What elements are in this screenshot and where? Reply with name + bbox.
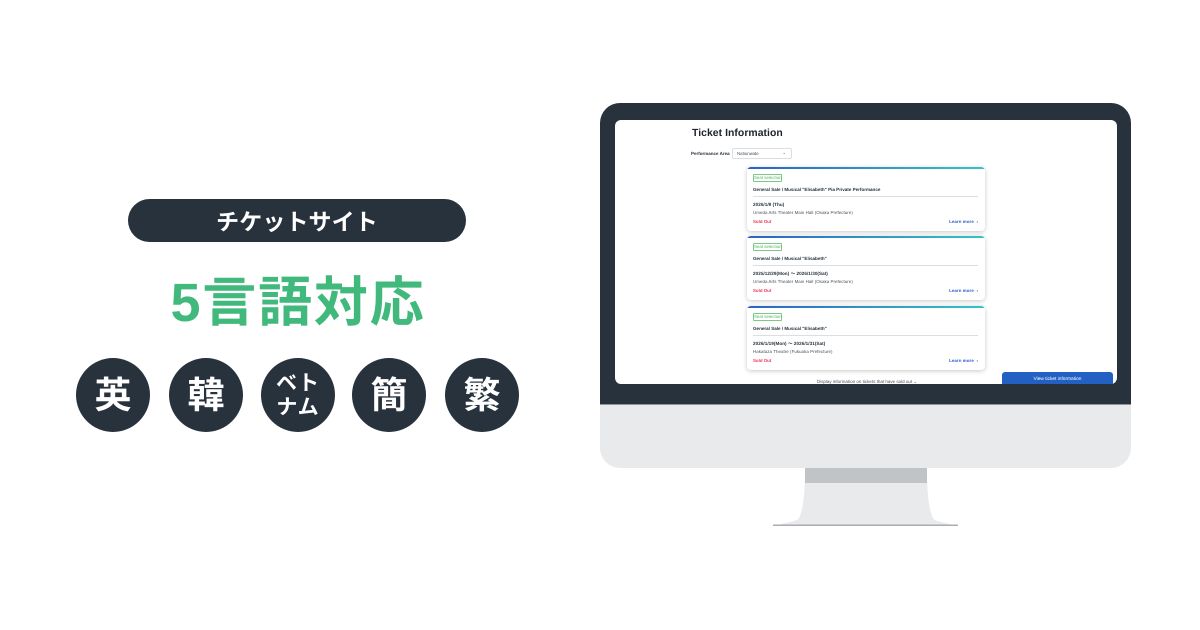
view ticket button: View ticket information: [1034, 377, 1081, 382]
ticket card 2: Umeda Arts Theater Main Hall (Osaka Prefecture): [753, 279, 853, 284]
seat tag: [753, 313, 782, 321]
seat tag: [753, 243, 782, 251]
language badge: Simplified Chinese: 簡: [370, 375, 408, 416]
badge: ticket site: [128, 199, 466, 242]
title: 5 language support: 5言語対応: [170, 273, 426, 333]
ticket card 2: [747, 236, 985, 300]
area dropdown: ⌄: [782, 150, 786, 155]
language badge: Vietnamese: ベト: [276, 372, 320, 395]
seat tag: Seat selection: [754, 244, 782, 249]
language badge: Korean: 韓: [188, 375, 224, 416]
language badge: Vietnamese: [261, 358, 335, 432]
language badge: Traditional Chinese: 繁: [464, 375, 500, 416]
ticket card 1: General Sale / Musical "Elisabeth" Pia Private Performance: [753, 187, 880, 192]
ticket card 3: 2026/1/19(Mon) ～ 2026/1/31(Sat): [753, 341, 825, 346]
ticket card 1: Umeda Arts Theater Main Hall (Osaka Prefecture): [753, 210, 853, 215]
sold out toggle link: Display information on tickets that have sold out ⌄: [817, 379, 917, 384]
language badge: Simplified Chinese: [352, 358, 426, 432]
monitor illustration: [600, 103, 1131, 526]
seat tag: Seat selection: [754, 314, 782, 319]
ticket card 1: Learn more ›: [949, 219, 978, 224]
screen heading: Ticket Information: [692, 128, 783, 139]
ticket card 2: Learn more ›: [949, 288, 978, 293]
language badge: English: [76, 358, 150, 432]
language badge: Traditional Chinese: [445, 358, 519, 432]
language badge: Vietnamese: ナム: [276, 396, 320, 419]
screen: [615, 120, 1117, 384]
ticket card 3: Sold Out: [753, 358, 771, 363]
ticket card 1: [747, 167, 985, 231]
language badge: English: 英: [94, 375, 132, 416]
seat tag: Seat selection: [754, 175, 782, 180]
ticket card 2: Sold Out: [753, 288, 771, 293]
ticket card 1: Sold Out: [753, 219, 771, 224]
seat tag: [753, 174, 782, 182]
area dropdown: [732, 148, 792, 159]
performance area label: Performance Area: [691, 151, 730, 156]
monitor stand: [773, 468, 958, 526]
ticket card 3: [747, 306, 985, 370]
ticket card 2: 2025/12/29(Mon) ～ 2026/1/30(Sat): [753, 271, 828, 276]
area dropdown: Nationwide: [737, 151, 759, 156]
ticket card 3: Learn more ›: [949, 358, 978, 363]
ticket card 1: 2026/1/8 (Thu): [753, 202, 784, 207]
language badge: Korean: [169, 358, 243, 432]
badge: ticket site: チケットサイト: [216, 209, 378, 235]
monitor chin: [600, 103, 1131, 468]
ticket card 3: General Sale / Musical "Elisabeth": [753, 326, 827, 331]
ticket card 2: General Sale / Musical "Elisabeth": [753, 256, 827, 261]
ticket card 3: Hakataza Theatre (Fukuoka Prefecture): [753, 349, 832, 354]
monitor bezel: [600, 103, 1131, 405]
view ticket button: [1002, 372, 1113, 384]
